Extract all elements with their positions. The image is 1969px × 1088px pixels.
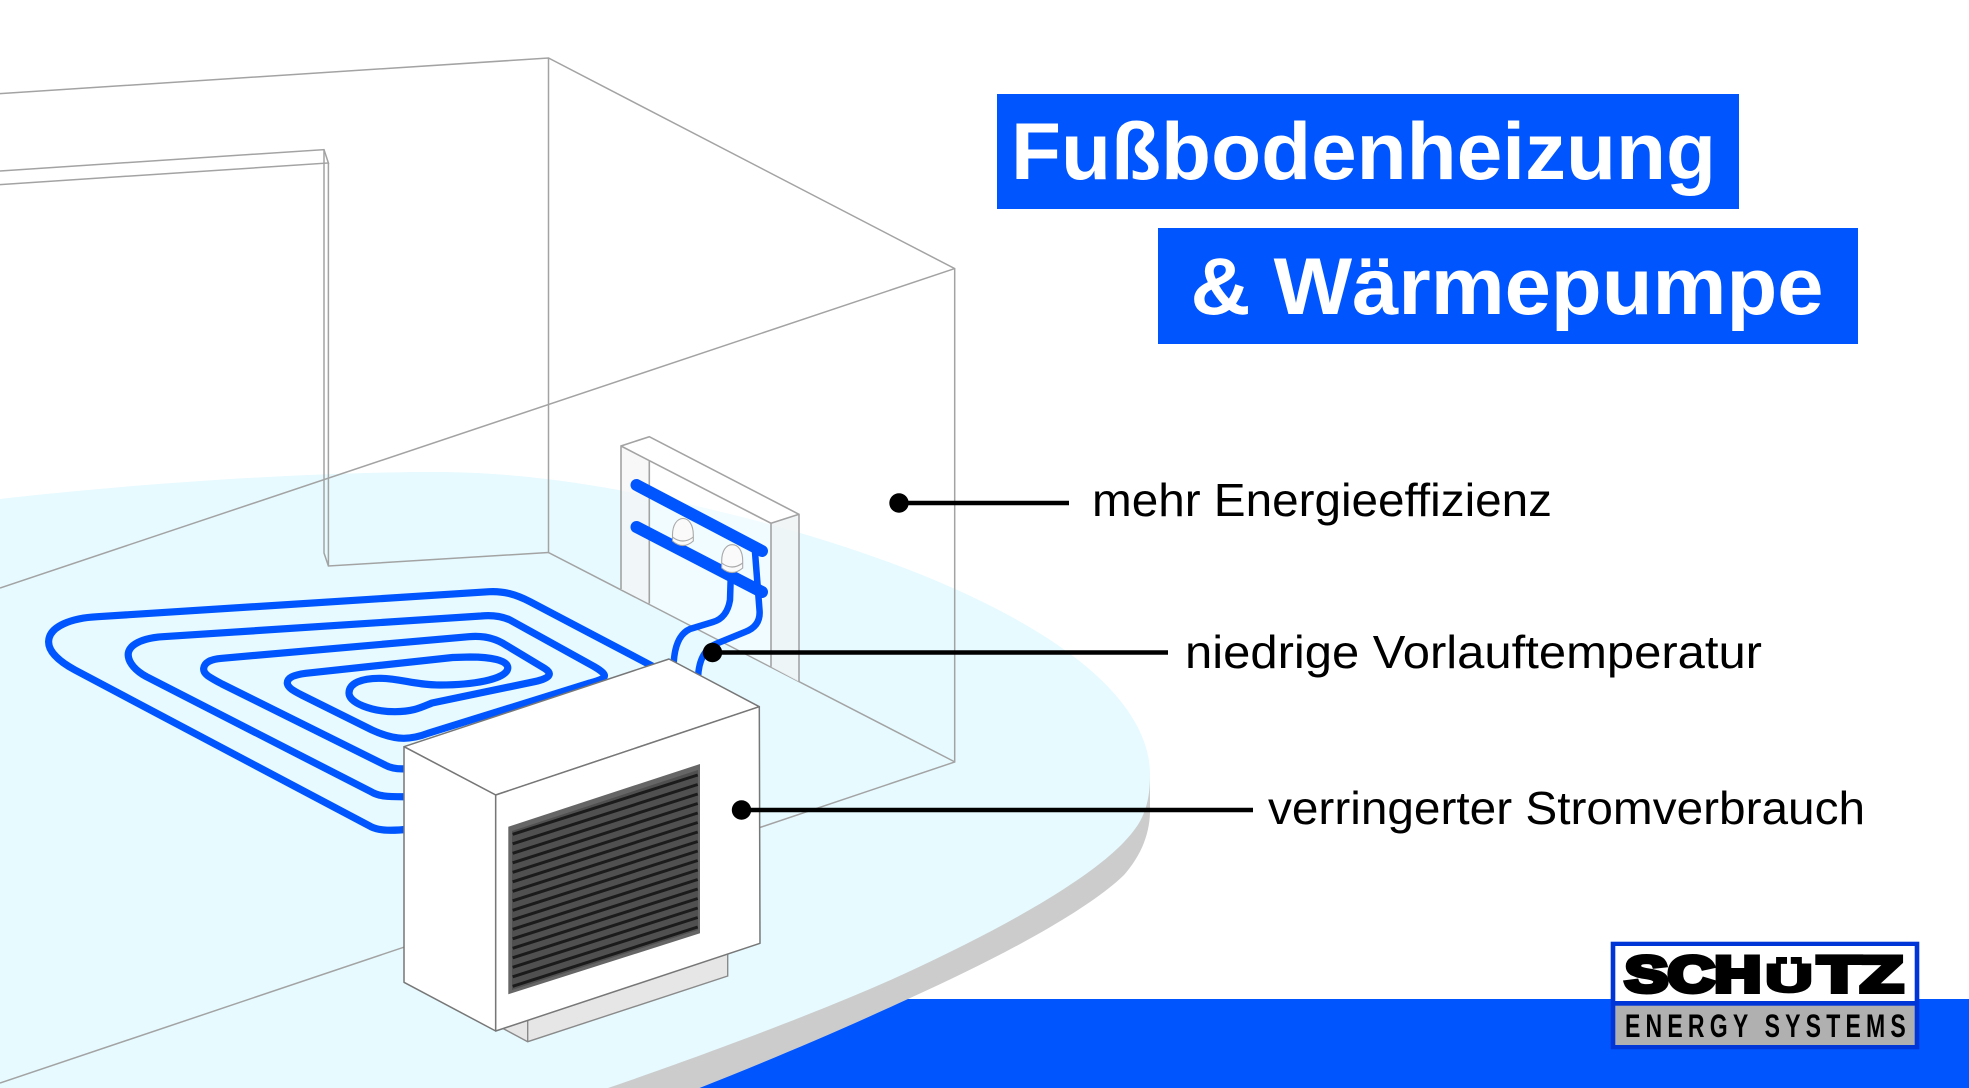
floor slab xyxy=(0,472,1150,1088)
icon: valve left xyxy=(672,518,693,546)
logo: Schütz Energy Systems xyxy=(1611,942,1919,1049)
icon: valve right xyxy=(722,545,743,572)
logo: Schütz Energy Systems: TZ xyxy=(1818,946,1903,1002)
logo: Schütz Energy Systems: SCH xyxy=(1625,946,1761,1002)
title line 1: Fußbodenheizung xyxy=(1011,107,1716,197)
underfloor heating coil xyxy=(49,592,656,830)
leader dot: mehr Energieeffizienz xyxy=(889,493,1069,513)
title line 2: & Wärmepumpe xyxy=(1190,242,1824,332)
logo: Schütz Energy Systems: ENERGY SYSTEMS xyxy=(1625,1008,1906,1044)
heat pump housing xyxy=(404,659,760,1031)
manifold pipes xyxy=(636,485,762,678)
floor slab shadow xyxy=(560,775,1150,1088)
title line 2 xyxy=(1158,228,1858,344)
leader dot: niedrige Vorlauftemperatur xyxy=(703,643,1168,662)
room walls outline xyxy=(0,58,955,1083)
manifold cabinet xyxy=(621,437,799,682)
label: verringerter Stromverbrauch: verringerter Stromverbrauch xyxy=(1268,782,1865,834)
label: mehr Energieeffizienz: mehr Energieeffizienz xyxy=(1092,474,1552,526)
blue footer band xyxy=(650,999,1969,1088)
logo: Schütz Energy Systems: Ü xyxy=(1765,956,1813,1000)
leader dot: verringerter Stromverbrauch xyxy=(732,800,1253,820)
heat pump grille xyxy=(508,764,700,994)
heat pump base xyxy=(503,945,728,1042)
label: niedrige Vorlauftemperatur: niedrige Vorlauftemperatur xyxy=(1185,626,1762,678)
